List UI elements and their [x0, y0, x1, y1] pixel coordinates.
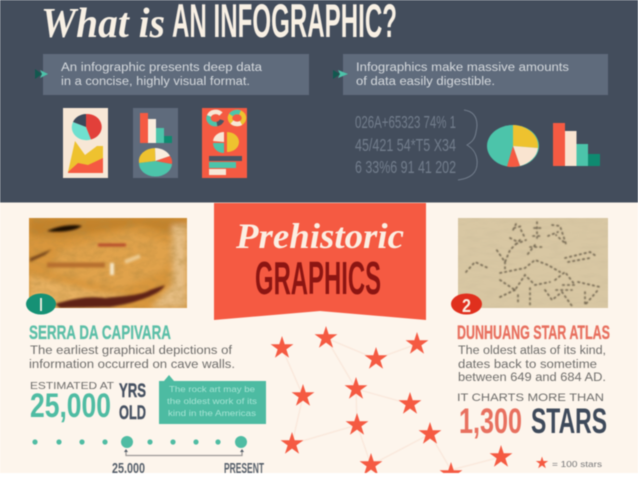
- title: [41, 0, 397, 47]
- pie chart: [487, 125, 539, 167]
- data noise text: 45/421 54*T5 X34: [355, 135, 456, 155]
- star map: [271, 326, 512, 478]
- callout: rock art: The rock art may be: [169, 384, 255, 394]
- photo: cave painting: [29, 218, 187, 308]
- callout: digestible: Infographics make massive amounts: [356, 62, 569, 74]
- icon: poster with pie and area chart: [63, 108, 108, 178]
- callout: deep data: An infographic presents deep data: [61, 62, 263, 74]
- stat: 25,000 years old: YRS: [119, 380, 146, 402]
- banner: prehistoric graphics: GRAPHICS: [255, 252, 381, 304]
- stat: 1,300 stars: [457, 392, 607, 441]
- banner: prehistoric graphics: Prehistoric: [235, 216, 404, 256]
- stat: 25,000 years old: 25,000: [30, 387, 111, 425]
- timeline: [32, 436, 264, 477]
- callout: deep data: in a concise, highly visual format.: [61, 76, 250, 88]
- banner: prehistoric graphics: [214, 203, 426, 320]
- text: star atlas: dates back to sometime: [458, 359, 597, 371]
- timeline: 25,000: [112, 461, 145, 477]
- callout: rock art: [159, 375, 266, 424]
- text: cave walls: [29, 345, 235, 371]
- callout: rock art: the oldest work of its: [167, 396, 257, 406]
- text: star atlas: [458, 345, 606, 384]
- legend: 100 stars: [536, 456, 602, 469]
- callout: rock art: kind in the Americas: [168, 408, 256, 418]
- icon: poster with donuts, pie and bars: [202, 108, 247, 178]
- badge: number 1: I: [39, 295, 43, 315]
- callout: digestible: of data easily digestible.: [356, 76, 495, 88]
- heading: serra da capivara: SERRA DA CAPIVARA: [29, 322, 171, 344]
- data noise text: 026A+65323 74% 1: [355, 112, 456, 132]
- brace: [458, 110, 477, 180]
- data noise text: [355, 112, 456, 177]
- stat: 1,300 stars: IT CHARTS MORE THAN: [457, 392, 604, 404]
- timeline: PRESENT: [224, 461, 264, 477]
- text: cave walls: The earliest graphical depictions of: [30, 345, 233, 357]
- callout: digestible: [333, 54, 608, 95]
- stat: 25,000 years old: OLD: [119, 402, 146, 424]
- badge: number 2: 2: [462, 296, 471, 316]
- stat: 1,300 stars: 1,300: [459, 402, 522, 441]
- text: star atlas: The oldest atlas of its kind,: [458, 345, 606, 357]
- legend: 100 stars: = 100 stars: [552, 459, 602, 469]
- text: star atlas: between 649 and 684 AD.: [458, 372, 606, 384]
- photo: star atlas: [458, 218, 608, 308]
- bar chart: [553, 123, 600, 166]
- text: cave walls: information occurred on cave walls.: [29, 359, 235, 371]
- badge: number 1: [26, 294, 56, 315]
- title: What is: [41, 1, 165, 47]
- panel: what is an infographic: [0, 0, 638, 202]
- callout: deep data: [35, 54, 309, 95]
- badge: number 2: [451, 294, 482, 316]
- stat: 25,000 years old: ESTIMATED AT: [30, 380, 115, 392]
- icon: poster with bars and pie: [133, 108, 178, 178]
- data noise text: 6 33%6 91 41 202: [355, 157, 456, 177]
- white bottom edge: [0, 473, 638, 478]
